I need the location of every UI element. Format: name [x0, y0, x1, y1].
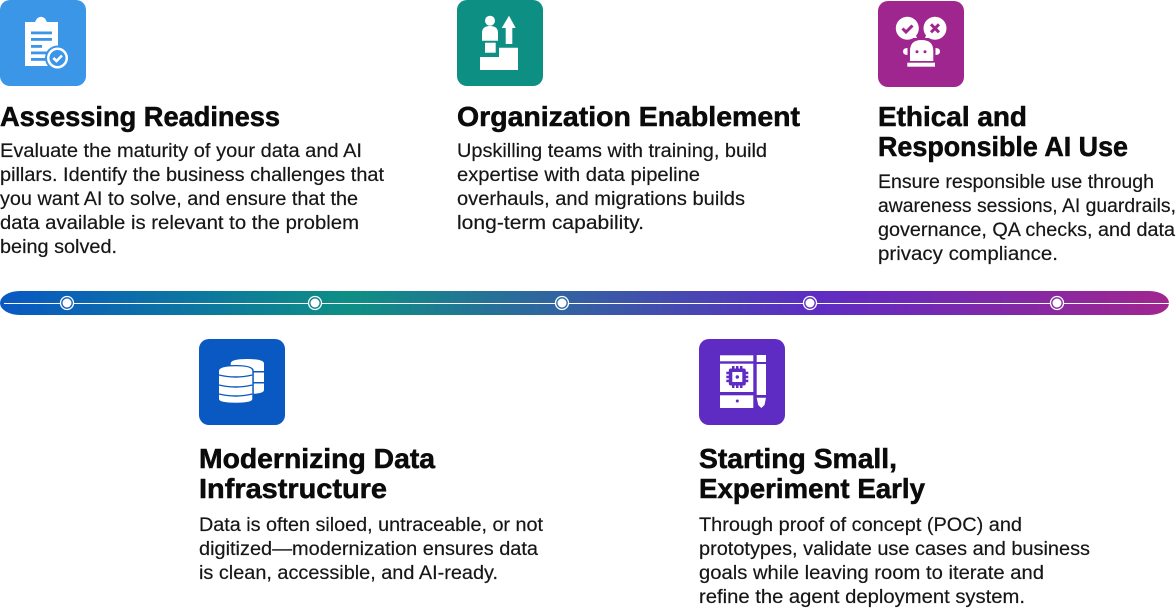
text: organization enablement description: [457, 141, 767, 234]
panel: ethical and responsible AI use: [878, 1, 1176, 265]
text: ethical AI description: privacy compliance.: [878, 244, 1058, 265]
text: starting small description: goals while leaving room to iterate and: [699, 563, 1044, 584]
heading: modernizing data infrastructure: Infrastructure: [199, 473, 387, 504]
text: assessing readiness description: [0, 141, 385, 258]
heading: assessing readiness: Assessing Readiness: [0, 101, 280, 132]
text: modernizing data description: [199, 515, 544, 584]
heading: starting small, experiment early: [699, 443, 925, 504]
heading: organization enablement: Organization Enablement: [457, 101, 800, 132]
text: ethical AI description: Ensure responsible use through: [878, 172, 1154, 193]
timeline marker 4: [804, 296, 816, 310]
text: ethical AI description: awareness sessions, AI guardrails,: [878, 196, 1176, 217]
text: organization enablement description: Upskilling teams with training, build: [457, 141, 767, 162]
text: modernizing data description: is clean, accessible, and AI-ready.: [199, 563, 498, 584]
text: assessing readiness description: Evaluate the maturity of your data and AI: [0, 141, 362, 162]
text: organization enablement description: overhauls, and migrations builds: [457, 189, 745, 210]
text: starting small description: [699, 515, 1090, 608]
icon: tablet with chip and pen: [699, 339, 785, 425]
text: modernizing data description: digitized—modernization ensures data: [199, 539, 538, 560]
icon: clipboard with check: [0, 0, 86, 86]
timeline marker 3: [556, 296, 568, 310]
heading: starting small, experiment early: Experiment Early: [699, 473, 925, 504]
icon: person climbing steps: [457, 0, 543, 86]
heading: modernizing data infrastructure: [199, 443, 435, 504]
text: modernizing data description: Data is often siloed, untraceable, or not: [199, 515, 544, 536]
timeline marker 5: [1050, 296, 1064, 310]
text: starting small description: Through proof of concept (POC) and: [699, 515, 1022, 536]
text: assessing readiness description: being solved.: [0, 237, 117, 258]
timeline bar: [0, 291, 1169, 315]
panel: modernizing data infrastructure: [199, 339, 544, 584]
heading: starting small, experiment early: Starting Small,: [699, 443, 897, 474]
text: starting small description: refine the agent deployment system.: [699, 587, 1025, 608]
heading: modernizing data infrastructure: Modernizing Data: [199, 443, 435, 474]
timeline marker 1: [60, 296, 74, 310]
text: starting small description: prototypes, validate use cases and business: [699, 539, 1090, 560]
heading: ethical and responsible AI use: [878, 101, 1128, 162]
icon: robot with approve and reject bubbles: [878, 1, 964, 87]
panel: starting small, experiment early: [699, 339, 1090, 608]
text: assessing readiness description: pillars. Identify the business challenges that: [0, 165, 385, 186]
timeline marker 2: [308, 296, 322, 310]
text: assessing readiness description: data available is relevant to the problem: [0, 213, 359, 234]
text: ethical AI description: [878, 172, 1176, 265]
heading: ethical and responsible AI use: Ethical and: [878, 101, 1027, 132]
text: assessing readiness description: you want AI to solve, and ensure that the: [0, 189, 358, 210]
text: ethical AI description: governance, QA checks, and data: [878, 220, 1175, 241]
icon: database stacks: [199, 339, 285, 425]
text: organization enablement description: expertise with data pipeline: [457, 165, 700, 186]
text: organization enablement description: long-term capability.: [457, 213, 644, 234]
panel: organization enablement: [457, 0, 800, 234]
panel: assessing readiness: [0, 0, 385, 258]
heading: ethical and responsible AI use: Responsible AI Use: [878, 131, 1128, 162]
